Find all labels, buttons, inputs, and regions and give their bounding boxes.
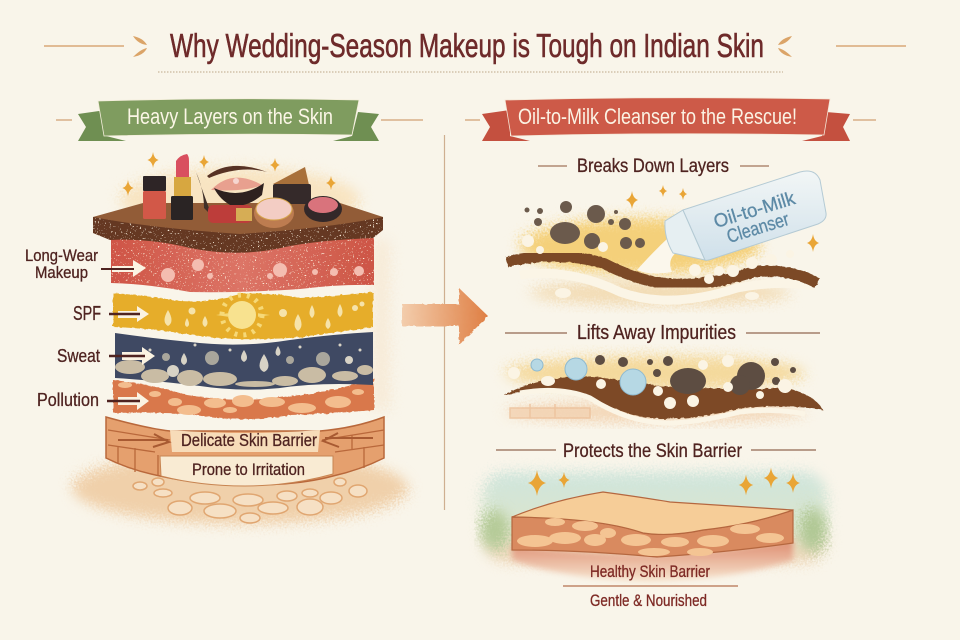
center divider (444, 135, 446, 510)
label: pollution: Pollution (37, 390, 99, 410)
faint bricks (510, 404, 590, 418)
label: sweat: Sweat (57, 345, 100, 366)
banner: oil-to-milk cleanser to the rescue (465, 98, 876, 141)
illustration: cleanser bottle: Cleanser (724, 209, 792, 248)
powder halo around stack (72, 168, 408, 524)
arrow: from problem to solution (402, 288, 488, 345)
illustration: skin layer stack (72, 152, 408, 524)
bricks (517, 518, 784, 556)
sparkles (122, 152, 336, 196)
label: spf: SPF (73, 303, 101, 325)
icon: bronzer palette (273, 167, 311, 204)
icon: nail polish (143, 176, 166, 219)
illustration: powder and residue wave (507, 185, 819, 305)
label: sweat (57, 345, 155, 366)
illustration: cleanser bottle (637, 171, 826, 274)
label: pollution (37, 390, 149, 410)
icon: eye with shadow (196, 166, 267, 216)
heading: Breaks Down Layers (577, 155, 729, 177)
icon: lipstick (171, 154, 193, 220)
banner: heavy layers on the skin (56, 99, 423, 141)
icon: pink compact (254, 198, 294, 228)
barrier arrows (118, 433, 373, 447)
icon: sun (216, 295, 270, 335)
cobble stones (133, 478, 367, 523)
white pebbles (508, 355, 792, 409)
banner: heavy layers on the skin: Heavy Layers on the Skin (127, 104, 333, 129)
heading: Protects the Skin Barrier (563, 440, 742, 462)
label: long-wear makeup: Makeup (35, 264, 88, 282)
label: long-wear makeup: Long-Wear (25, 247, 98, 265)
label: long-wear makeup (25, 247, 146, 282)
white pebbles (522, 235, 794, 300)
halo (481, 472, 827, 562)
slab (512, 510, 793, 557)
illustration: impurities wave (503, 355, 823, 423)
divider and label: gentle and nourished: Gentle & Nourished (590, 592, 707, 610)
illustration: healthy skin (481, 468, 827, 582)
dark residue (524, 201, 645, 249)
step: breaks down layers (507, 155, 826, 305)
title (44, 27, 906, 72)
heading: Lifts Away Impurities (577, 322, 736, 344)
step: lifts away impurities (503, 322, 823, 423)
title: Why Wedding-Season Makeup is Tough on Indian Skin (170, 27, 764, 64)
pollution layer (113, 378, 374, 419)
makeup items (122, 152, 342, 228)
banner: oil-to-milk cleanser to the rescue: Oil-to-Milk Cleanser to the Rescue! (518, 104, 797, 129)
icon: blush compact (304, 196, 342, 222)
prone to irritation label: Prone to Irritation (192, 461, 305, 479)
illustration: cleanser bottle: Oil-to-Milk (711, 188, 798, 233)
labels with arrows: makeup layers (25, 247, 155, 410)
pink underlayer (512, 540, 793, 582)
spf layer (113, 292, 373, 339)
label: healthy skin barrier: Healthy Skin Barrier (590, 562, 710, 581)
sweat layer (115, 332, 373, 390)
brown top slab (93, 203, 383, 253)
step: protects the skin barrier (481, 440, 827, 610)
label: spf (73, 303, 149, 325)
sparkles (528, 468, 800, 496)
bubbles (531, 358, 646, 395)
sparkles (626, 185, 819, 252)
dirt clumps (595, 355, 796, 395)
long-wear makeup layer (111, 238, 374, 292)
brick skin barrier (106, 417, 384, 486)
delicate skin barrier label: Delicate Skin Barrier (181, 430, 317, 450)
icon: red tube (208, 205, 252, 223)
